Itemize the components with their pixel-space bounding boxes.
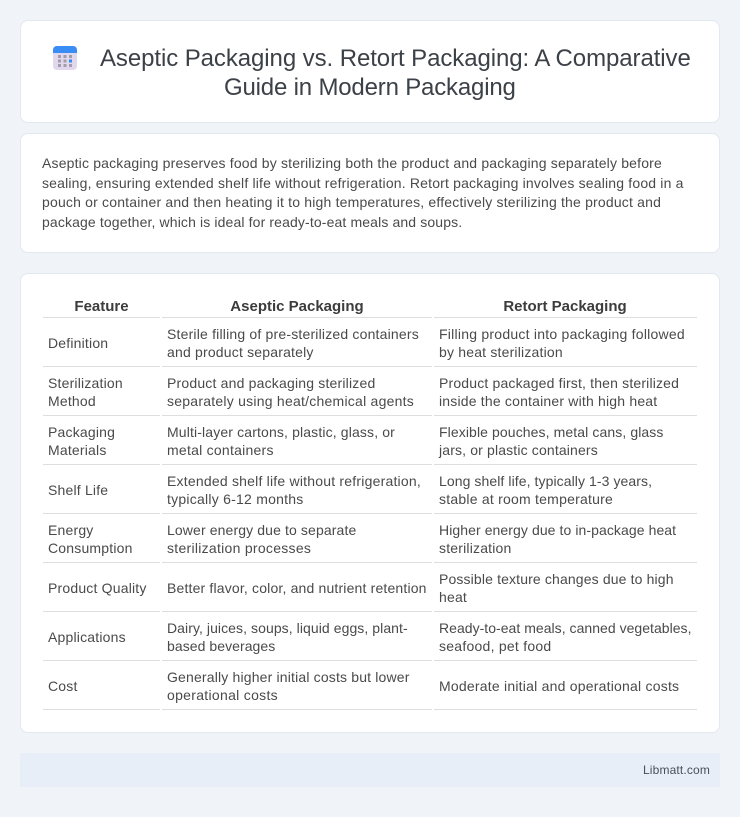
panel: title card <box>20 20 720 123</box>
row: cost: Cost <box>48 678 78 694</box>
icon: calendar grid <box>53 46 77 70</box>
text block: introduction: pouch or container and then heating it to high temperatures, effectively sterilizing the product and <box>42 194 661 210</box>
row: applications: Dairy, juices, soups, liquid eggs, plant- <box>167 620 408 636</box>
row: shelf life: Extended shelf life without refrigeration, <box>167 473 421 489</box>
row: sterilization method <box>48 375 679 409</box>
panel: comparison table <box>20 273 720 733</box>
row: product quality <box>48 571 674 605</box>
table header: Aseptic Packaging <box>230 298 364 315</box>
row: shelf life: typically 6-12 months <box>167 491 304 507</box>
text block: introduction: sealing, ensuring extended shelf life without refrigeration. Retort packaging involves sealing food in a <box>42 175 684 191</box>
comparison table <box>43 298 697 710</box>
footer credit: Libmatt.com <box>643 763 710 777</box>
table header <box>74 298 627 315</box>
row: applications: Applications <box>48 629 126 645</box>
row: packaging materials: metal containers <box>167 442 274 458</box>
row: packaging materials: Materials <box>48 442 107 458</box>
row: product quality: heat <box>439 589 467 605</box>
table header: Feature <box>74 298 129 315</box>
row: energy consumption: sterilization <box>439 540 512 556</box>
row: sterilization method: Sterilization <box>48 375 123 391</box>
text block: introduction: package together, which is ideal for ready-to-eat meals and soups. <box>42 214 462 230</box>
row: definition: Sterile filling of pre-sterilized containers <box>167 326 419 342</box>
row: energy consumption <box>48 522 676 556</box>
row: cost: Generally higher initial costs but lower <box>167 669 410 685</box>
row: energy consumption: Energy <box>48 522 94 538</box>
row: applications: Ready-to-eat meals, canned vegetables, <box>439 620 692 636</box>
row: product quality: Possible texture changes due to high <box>439 571 674 587</box>
row: packaging materials: Multi-layer cartons, plastic, glass, or <box>167 424 395 440</box>
row: sterilization method: Method <box>48 393 96 409</box>
row: packaging materials: Flexible pouches, metal cans, glass <box>439 424 664 440</box>
row: product quality: Better flavor, color, and nutrient retention <box>167 580 427 596</box>
text block: introduction <box>42 155 684 230</box>
row: packaging materials: Packaging <box>48 424 115 440</box>
row: sterilization method: Product and packaging sterilized <box>167 375 375 391</box>
row: product quality: Product Quality <box>48 580 147 596</box>
row: energy consumption: Higher energy due to in-package heat <box>439 522 676 538</box>
row: energy consumption: Consumption <box>48 540 133 556</box>
row: sterilization method: Product packaged first, then sterilized <box>439 375 679 391</box>
title: Guide in Modern Packaging <box>224 74 516 101</box>
row: shelf life: Shelf Life <box>48 482 108 498</box>
row: packaging materials: jars, or plastic containers <box>439 442 598 458</box>
row: definition: Definition <box>48 335 108 351</box>
row: sterilization method: inside the container with high heat <box>439 393 657 409</box>
row: applications: based beverages <box>167 638 275 654</box>
row: shelf life: stable at room temperature <box>439 491 613 507</box>
row: energy consumption: Lower energy due to separate <box>167 522 356 538</box>
row: definition: Filling product into packaging followed <box>439 326 685 342</box>
row: applications: seafood, pet food <box>439 638 551 654</box>
title: Aseptic Packaging vs. Retort Packaging: A Comparative <box>100 45 691 72</box>
row: applications <box>48 620 692 654</box>
row: packaging materials <box>48 424 664 458</box>
row: definition <box>48 326 685 360</box>
row: energy consumption: sterilization processes <box>167 540 311 556</box>
table header: Retort Packaging <box>503 298 627 315</box>
row: shelf life: Long shelf life, typically 1-3 years, <box>439 473 652 489</box>
title <box>100 45 691 101</box>
row: cost: operational costs <box>167 687 278 703</box>
panel: introduction <box>20 133 720 253</box>
row: definition: by heat sterilization <box>439 344 563 360</box>
row: sterilization method: separately using heat/chemical agents <box>167 393 414 409</box>
footer bar <box>20 753 720 787</box>
row: shelf life <box>48 473 652 507</box>
row: definition: and product separately <box>167 344 314 360</box>
row: cost: Moderate initial and operational costs <box>439 678 679 694</box>
text block: introduction: Aseptic packaging preserves food by sterilizing both the product and packaging separately before <box>42 155 662 171</box>
row: cost <box>48 669 679 703</box>
